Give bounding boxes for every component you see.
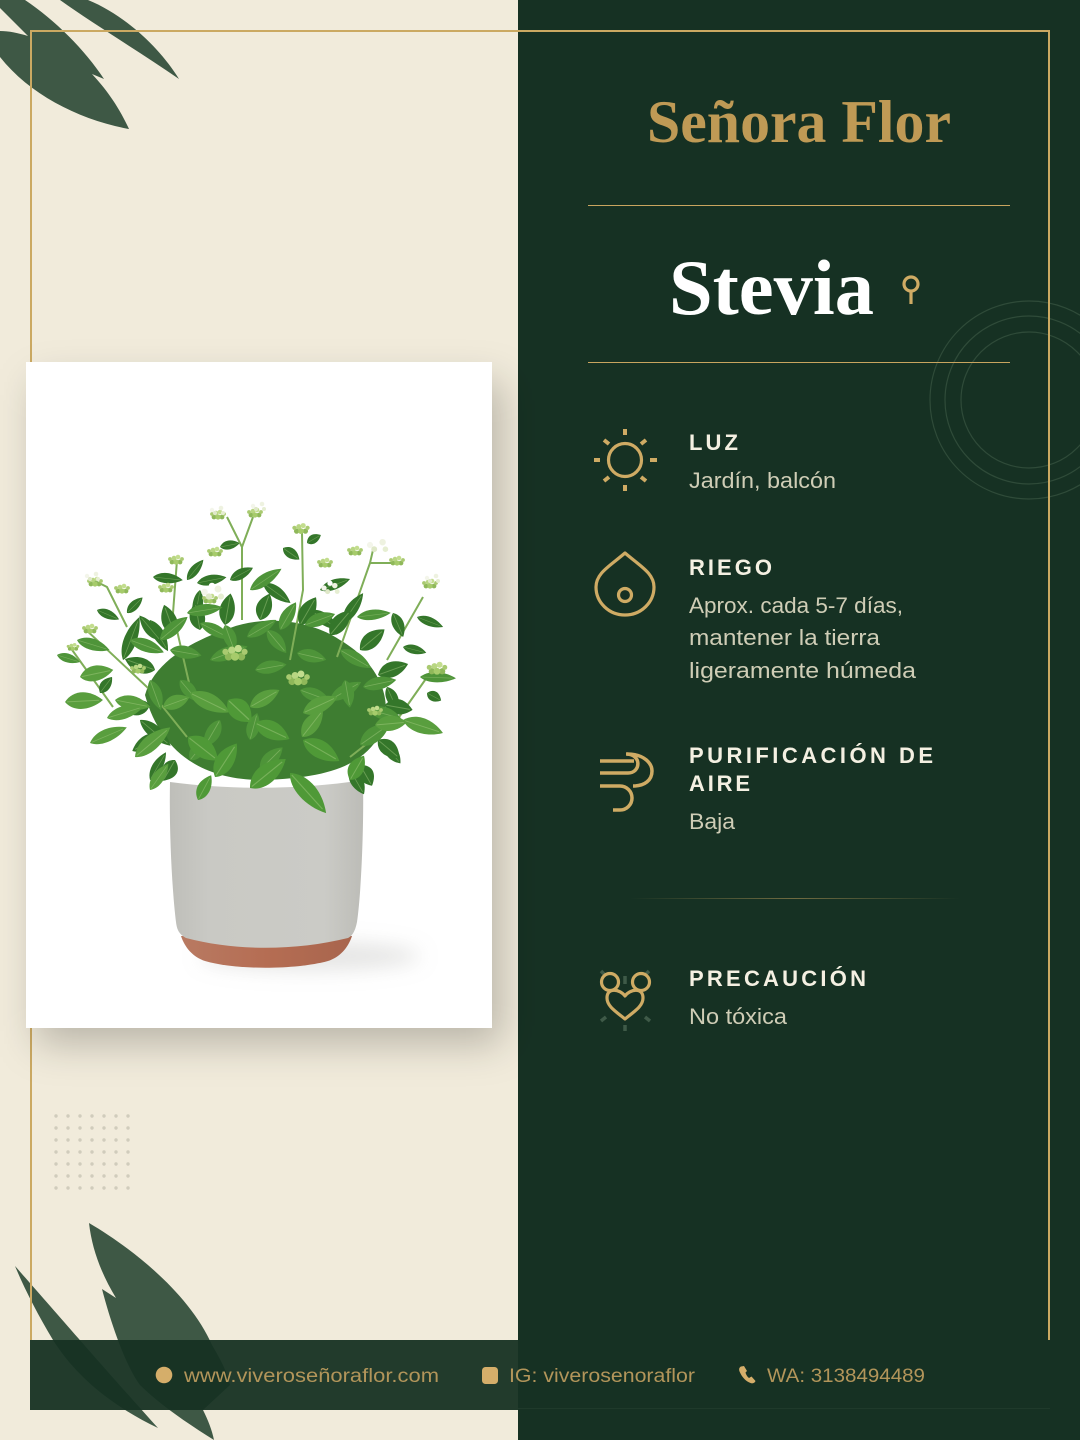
icon: sun: [594, 429, 657, 491]
leaves bright front: [182, 692, 370, 819]
section: luz: Jardín, balcón: [689, 468, 836, 493]
section: precaución: PRECAUCIÓN: [689, 966, 866, 991]
stems: [70, 517, 430, 757]
section: purificación de aire: PURIFICACIÓN DE: [689, 743, 933, 768]
leaves dark layer: [95, 531, 445, 797]
decorative dot grid: [54, 1114, 130, 1190]
plant foliage: [56, 500, 456, 819]
section: riego: ligeramente húmeda: [689, 658, 917, 683]
divider: [588, 362, 1010, 363]
section: riego: RIEGO: [689, 555, 772, 580]
plant photo card: [26, 362, 502, 1044]
panel: cream left background: [0, 0, 518, 1440]
leaves front layer: [65, 662, 445, 793]
flower buds: [67, 508, 447, 716]
section: riego: [689, 555, 917, 683]
icon: heart with rings: [601, 971, 650, 1031]
footer: website: www.viveroseñoraflor.com: [183, 1366, 439, 1387]
section: precaución: [689, 966, 866, 1029]
icon: plant pin symbol: [904, 277, 918, 304]
decorative leaves: top left: [0, 0, 179, 129]
panel: dark green right background: [518, 0, 1080, 1440]
icon: wind: [600, 754, 652, 810]
footer bar: [30, 1340, 1050, 1410]
grey pot body: [170, 780, 363, 948]
section: purificación de aire: Baja: [689, 809, 736, 834]
section: riego: Aprox. cada 5-7 días,: [689, 593, 903, 618]
divider: [588, 205, 1010, 206]
section: luz: [689, 430, 836, 493]
brand title: Señora Flor: [647, 89, 951, 155]
leaves mid layer: [56, 564, 456, 775]
decorative leaves: bottom left: [15, 1223, 230, 1440]
section: riego: mantener la tierra: [689, 625, 881, 650]
terracotta pot base: [181, 936, 352, 968]
icon: water drop: [596, 553, 654, 615]
divider fade: [630, 898, 960, 899]
section: purificación de aire: [689, 743, 933, 834]
plant name: Stevia: [669, 244, 874, 331]
section: luz: LUZ: [689, 430, 738, 455]
footer: whatsapp phone: WA: 3138494489: [767, 1366, 925, 1387]
decorative concentric circles: [930, 301, 1080, 499]
footer: instagram: IG: viverosenoraflor: [509, 1366, 696, 1387]
section: purificación de aire: AIRE: [689, 771, 750, 796]
pot shadow: [200, 942, 420, 970]
section: precaución: No tóxica: [689, 1004, 788, 1029]
white flowers: [85, 500, 440, 600]
